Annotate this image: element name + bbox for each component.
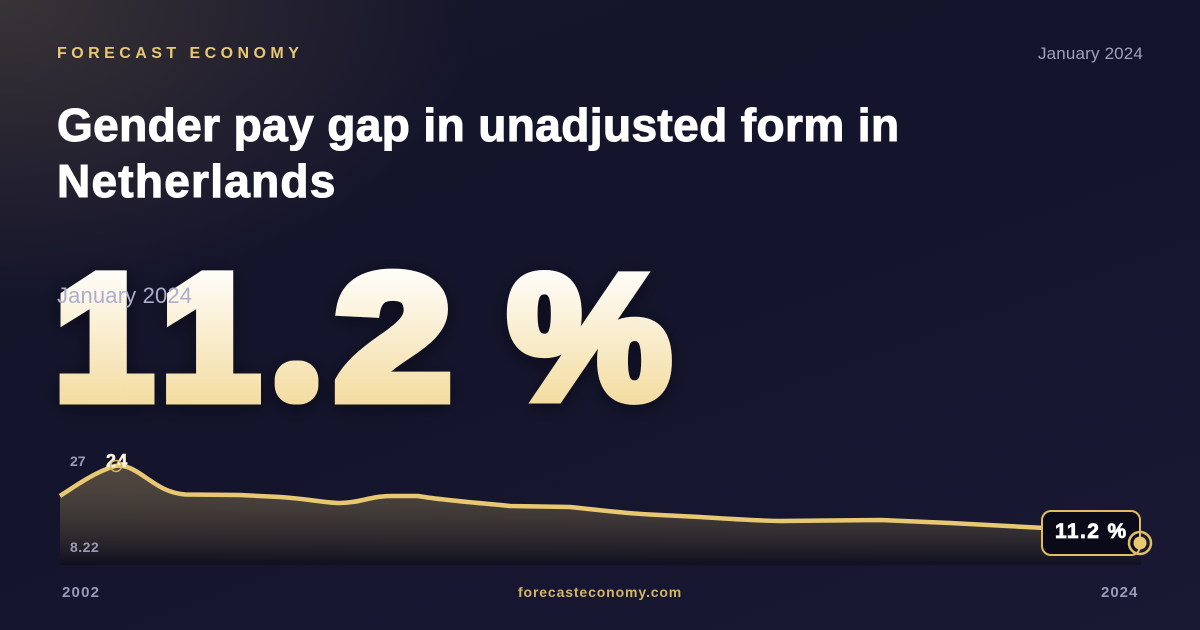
axis max label: 27 (70, 453, 86, 469)
peak value: 24 (106, 451, 128, 471)
callout: 11.2 % (1055, 520, 1128, 543)
axis min label: 8.22 (70, 539, 99, 555)
date top right: January 2024 (1038, 44, 1143, 63)
area fill (60, 466, 1141, 565)
title: Gender pay gap in unadjusted form in (57, 99, 900, 151)
title: Netherlands (57, 155, 337, 207)
big value: . (291, 350, 302, 394)
end marker (1129, 532, 1151, 554)
start year: 2002 (62, 584, 100, 601)
title (57, 99, 900, 207)
line chart (58, 451, 1152, 565)
trend line (60, 466, 1045, 528)
site url: forecasteconomy.com (518, 584, 682, 600)
date overlay: January 2024 (57, 283, 192, 308)
callout (1042, 511, 1140, 555)
brand label: FORECAST ECONOMY (57, 45, 303, 62)
end year: 2024 (1101, 584, 1138, 601)
big value: 2 (335, 239, 451, 430)
big value (55, 239, 672, 430)
peak marker (110, 460, 122, 472)
